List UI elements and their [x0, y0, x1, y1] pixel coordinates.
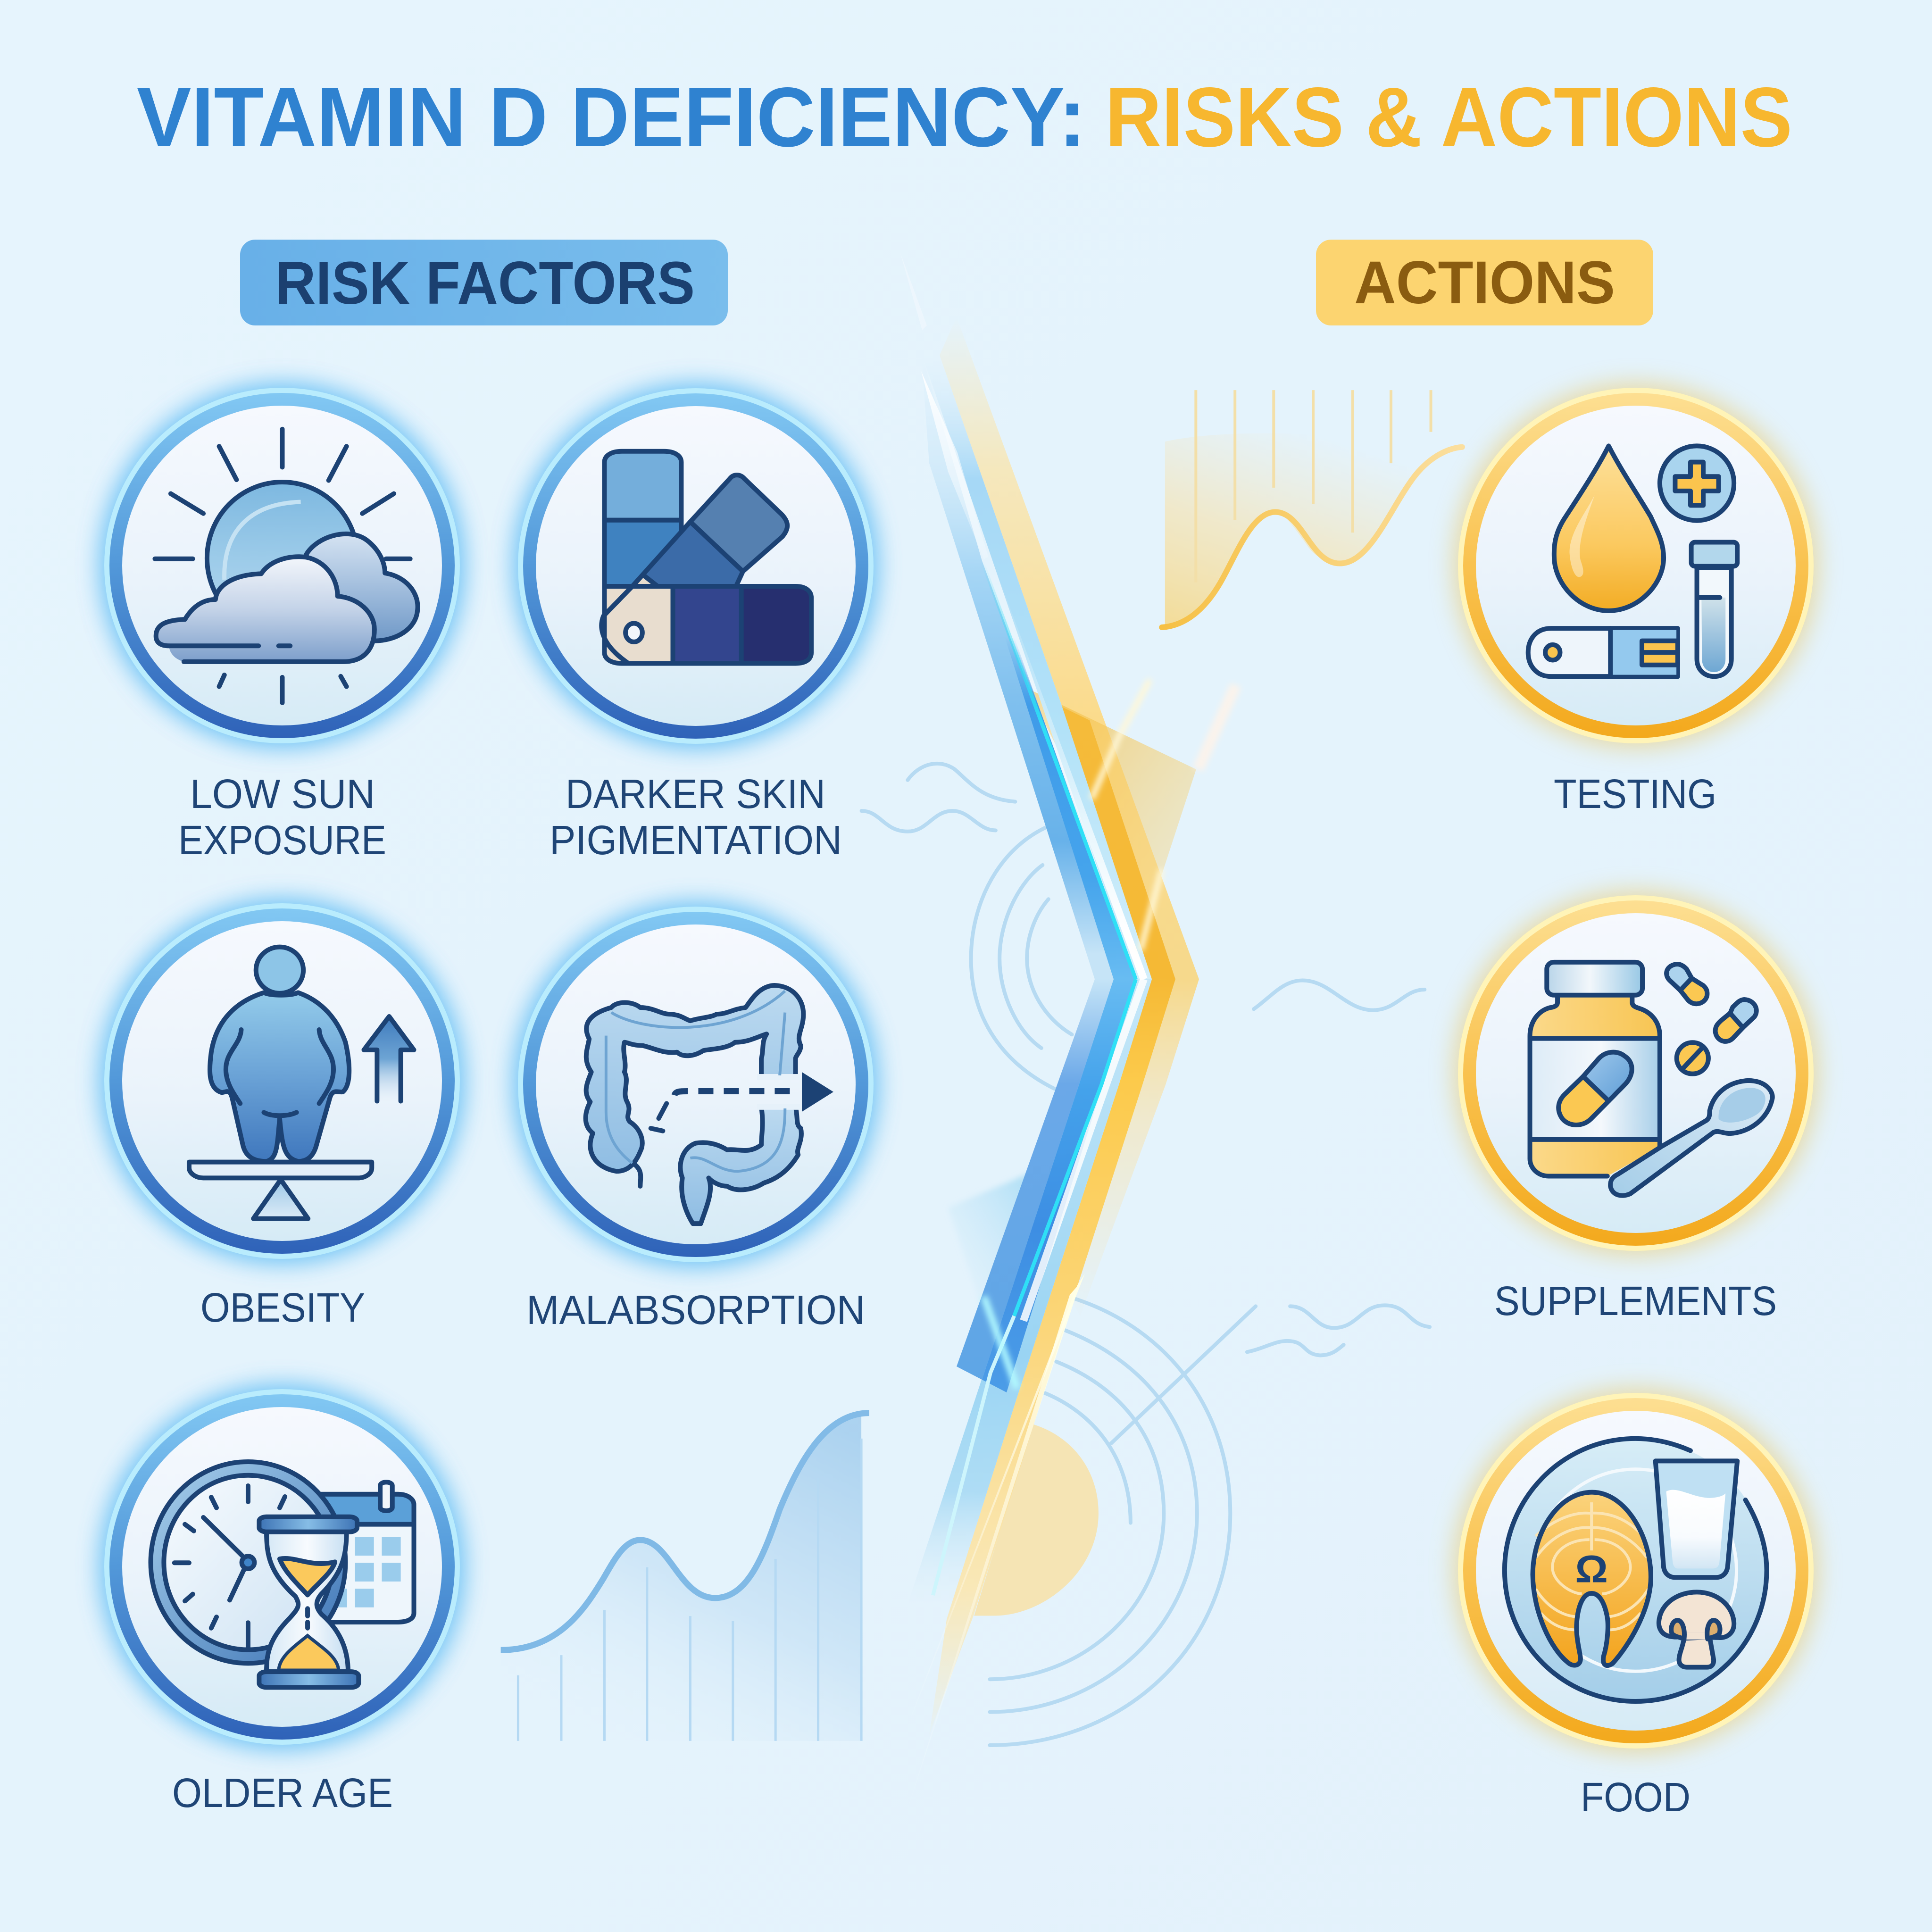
icon: skin tone swatches: [601, 451, 811, 663]
label: obesity: OBESITY: [200, 1285, 365, 1331]
title: VITAMIN D DEFICIENCY:: [137, 70, 1086, 164]
panel: malabsorption: [513, 901, 879, 1267]
panel: testing: [1453, 383, 1819, 749]
panel: older age: [99, 1384, 465, 1750]
decorative chart: golden wave: [1162, 390, 1462, 627]
panel: darker skin pigmentation: [513, 383, 879, 749]
panel: obesity: [99, 898, 465, 1264]
panel: low sun exposure: [99, 383, 465, 749]
icon: blood drop, test strip and tube: [1528, 446, 1737, 676]
title: RISKS & ACTIONS: [1105, 70, 1792, 164]
label: darker skin pigmentation: [550, 771, 842, 863]
icon: supplement jar, capsules and spoon: [1530, 962, 1773, 1196]
decorative sun with radiating arcs: [974, 1299, 1430, 1745]
label: darker skin pigmentation: PIGMENTATION: [550, 817, 842, 863]
label: food: FOOD: [1581, 1774, 1690, 1820]
decorative waves and arcs: upper: [862, 764, 1424, 1089]
label: testing: TESTING: [1554, 771, 1716, 817]
icon: calendar clock and hourglass: [151, 1462, 414, 1687]
icon: person on scale: [189, 947, 414, 1219]
label: low sun exposure: EXPOSURE: [178, 817, 386, 863]
icon: intestine with blocked arrow: [586, 985, 833, 1224]
decorative chart: rising blue curve: [501, 1413, 869, 1741]
label: darker skin pigmentation: DARKER SKIN: [566, 771, 825, 817]
label: older age: OLDER AGE: [172, 1770, 393, 1816]
icon: sun behind clouds: [155, 429, 418, 703]
heading: risk factors: RISK FACTORS: [275, 250, 695, 317]
label: low sun exposure: LOW SUN: [190, 771, 375, 817]
chevron divider: blue and gold arrow: [899, 252, 1236, 1837]
label: supplements: SUPPLEMENTS: [1494, 1278, 1777, 1324]
icon: plate with salmon, milk and mushroom: Ω: [1575, 1548, 1608, 1591]
icon: plate with salmon, milk and mushroom: [1504, 1439, 1767, 1701]
panel: food: [1453, 1388, 1819, 1754]
heading: actions: [1316, 240, 1653, 325]
panel: supplements: [1453, 890, 1819, 1256]
label: low sun exposure: [178, 771, 386, 863]
title: [137, 70, 1792, 164]
label: malabsorption: MALABSORPTION: [526, 1287, 865, 1333]
heading: actions: ACTIONS: [1354, 249, 1615, 316]
